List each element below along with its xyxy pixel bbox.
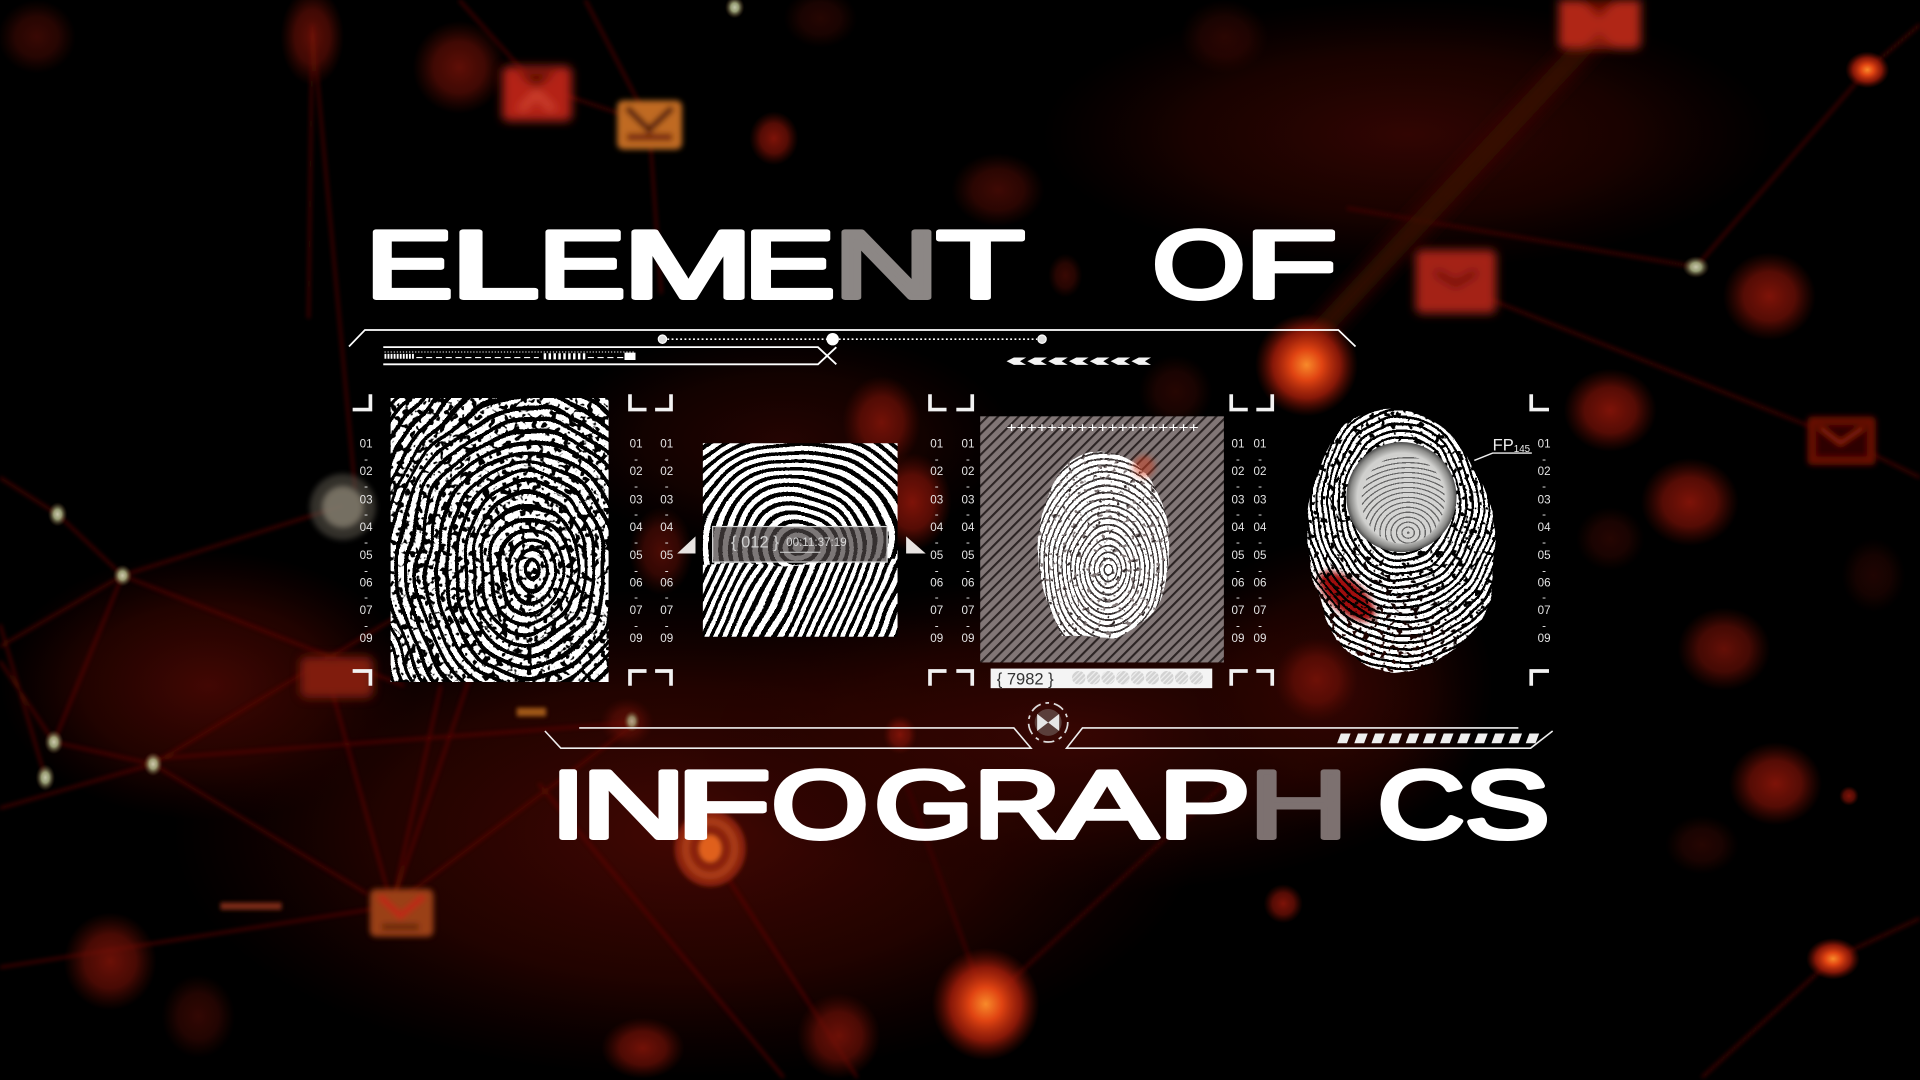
scale 8: - [1542, 508, 1546, 521]
scale 7: - [1258, 564, 1262, 577]
scale 5: 09 [961, 632, 974, 645]
top HUD frame [349, 330, 1356, 364]
scale 7: - [1258, 619, 1262, 632]
scale 4: 01 [930, 438, 943, 451]
title: INFOGRAPH CS [551, 753, 1550, 859]
scale 6: 01 [1231, 438, 1244, 451]
panel: fingerprint 4 with lens [1307, 409, 1532, 673]
scale 3: - [665, 536, 669, 549]
scale 1: - [364, 619, 368, 632]
scale 2: 07 [630, 604, 643, 617]
code tag: { 7982 } [997, 669, 1054, 688]
scale 5: 04 [961, 521, 975, 534]
magnifier lens [1346, 442, 1457, 552]
slash ticks [1337, 733, 1539, 743]
scale 4: 03 [930, 493, 943, 506]
scale 3: - [665, 453, 669, 466]
bottom HUD frame [545, 728, 1553, 748]
scale 2: 05 [630, 549, 643, 562]
scale 5: 01 [961, 438, 974, 451]
scale 3: - [665, 508, 669, 521]
fingerprint image [1038, 452, 1169, 639]
title: ELEMENT OF: T [936, 213, 1025, 319]
icon: envelope orange bottom-left [370, 889, 433, 937]
scale 8: 02 [1538, 465, 1551, 478]
scale 8: - [1542, 480, 1546, 493]
background: blurred small dashes [220, 708, 546, 910]
scale 7: 03 [1254, 493, 1266, 506]
title: ELEMENT OF [365, 213, 1337, 319]
scale 6: 07 [1231, 604, 1244, 617]
scale 5: - [966, 564, 970, 577]
scale 7: - [1258, 591, 1262, 604]
scale 2: - [634, 591, 638, 604]
scale 1: - [364, 508, 368, 521]
scale 5: 02 [961, 465, 974, 478]
scale 7: 01 [1254, 438, 1266, 451]
scale 5: 05 [961, 549, 974, 562]
scale 6: - [1236, 453, 1240, 466]
panel: fingerprint 2 [677, 443, 898, 637]
panel: fingerprint 1 [390, 398, 609, 682]
scale 7: 04 [1254, 521, 1267, 534]
title: INFOGRAPH CS: P [1158, 753, 1251, 859]
scale 8: - [1542, 536, 1546, 549]
plus marks row: +++++++++++++++++++ [1007, 420, 1199, 435]
title: ELEMENT OF: F [1244, 213, 1337, 319]
timecode overlay [713, 527, 887, 562]
FP label [1474, 436, 1532, 460]
emblem: circular scan icon [1026, 700, 1070, 744]
scale 8: - [1542, 591, 1546, 604]
scale 1: 02 [360, 465, 373, 478]
scale 1: 05 [360, 549, 373, 562]
scale 4: - [935, 508, 939, 521]
icon: envelope orange top [617, 100, 682, 149]
scale 7: - [1258, 536, 1262, 549]
icon: envelope red right [1416, 250, 1496, 313]
scale 8: - [1542, 564, 1546, 577]
scale 1: 07 [360, 604, 373, 617]
scale 3: 03 [660, 493, 673, 506]
scale 3: - [665, 619, 669, 632]
scale 6: - [1236, 591, 1240, 604]
panel: fingerprint 3 hatched [980, 416, 1224, 688]
scale 2: 02 [630, 465, 643, 478]
scale 6: - [1236, 536, 1240, 549]
scale 6: 03 [1231, 493, 1244, 506]
background: wide diagonal glow band [1286, 24, 1604, 367]
scale 2: - [634, 564, 638, 577]
scale 3: 05 [660, 549, 673, 562]
icon: envelope dim left [300, 656, 373, 698]
FP label: FP [1493, 436, 1514, 455]
scale 3: 06 [660, 577, 673, 590]
scale 1: - [364, 564, 368, 577]
title: ELEMENT OF: M [623, 213, 754, 319]
scale 8: 04 [1538, 521, 1551, 534]
scale 3: 02 [660, 465, 673, 478]
scale 1: 01 [360, 438, 373, 451]
title: ELEMENT OF: E [538, 213, 626, 319]
scale 4: - [935, 536, 939, 549]
scale 3: - [665, 564, 669, 577]
number scale columns [360, 438, 1551, 645]
scale 8: 06 [1538, 577, 1551, 590]
scale 7: 06 [1254, 577, 1266, 590]
scale 3: 09 [660, 632, 673, 645]
scale 1: - [364, 453, 368, 466]
icon: envelope red top-left [502, 66, 572, 121]
code tag [991, 669, 1212, 688]
scale 5: - [966, 536, 970, 549]
scale 7: - [1258, 480, 1262, 493]
scale 4: 02 [930, 465, 943, 478]
scale 5: - [966, 453, 970, 466]
scale 7: 05 [1254, 549, 1266, 562]
scale 6: 06 [1231, 577, 1244, 590]
title: INFOGRAPH CS: N [581, 753, 686, 859]
scale 7: - [1258, 508, 1262, 521]
scale 1: 03 [360, 493, 373, 506]
scale 5: 03 [961, 493, 974, 506]
timecode overlay: { 012 } [731, 532, 779, 551]
scale 6: - [1236, 508, 1240, 521]
background: small light nodes [36, 0, 1709, 791]
corner brackets [353, 394, 1549, 686]
scale 2: - [634, 453, 638, 466]
title: INFOGRAPH CS: G [874, 753, 974, 859]
scale 1: - [364, 536, 368, 549]
scale 2: 03 [630, 493, 643, 506]
scale 3: - [665, 480, 669, 493]
title: ELEMENT OF: N [833, 213, 940, 319]
icon: envelope red top-right [1559, 0, 1641, 49]
scale 1: - [364, 480, 368, 493]
scale 7: 07 [1254, 604, 1266, 617]
scale 6: 04 [1231, 521, 1245, 534]
scale 2: - [634, 508, 638, 521]
scale 2: - [634, 619, 638, 632]
scale 5: 07 [961, 604, 974, 617]
title: INFOGRAPH CS: I [551, 753, 585, 859]
scale 8: 01 [1538, 438, 1551, 451]
scale 4: - [935, 453, 939, 466]
scale 6: 09 [1231, 632, 1244, 645]
title: INFOGRAPH CS: H [1249, 753, 1348, 859]
dotted timeline with nodes [658, 334, 1046, 345]
scale 3: 01 [660, 438, 673, 451]
red stain [1310, 562, 1383, 631]
scale 7: 02 [1254, 465, 1266, 478]
scale 5: - [966, 591, 970, 604]
red glint [1133, 456, 1155, 478]
scale 8: 05 [1538, 549, 1551, 562]
background: orange ring light [675, 811, 746, 887]
scale 7: 09 [1254, 632, 1266, 645]
scale 8: - [1542, 453, 1546, 466]
chevron row [1007, 358, 1151, 365]
scale 6: - [1236, 619, 1240, 632]
title: INFOGRAPH CS: O [771, 753, 869, 859]
title: INFOGRAPH CS: F [676, 753, 771, 859]
scale 4: - [935, 619, 939, 632]
scale 1: 06 [360, 577, 373, 590]
scale 4: 09 [930, 632, 943, 645]
background: grey ring light [310, 474, 376, 540]
scale 3: 04 [660, 521, 674, 534]
scale 4: 07 [930, 604, 943, 617]
scale 8: 07 [1538, 604, 1551, 617]
scale 5: - [966, 480, 970, 493]
title: ELEMENT OF: E [743, 213, 835, 319]
scale 3: 07 [660, 604, 673, 617]
title: INFOGRAPH CS: S [1465, 753, 1550, 859]
scale 6: - [1236, 480, 1240, 493]
scale 4: 05 [930, 549, 943, 562]
scale 2: - [634, 536, 638, 549]
scale 4: 04 [930, 521, 944, 534]
title: INFOGRAPH CS: A [1057, 753, 1158, 859]
left pointer triangle [677, 536, 696, 553]
FP label: 145 [1514, 444, 1531, 455]
scale 6: 02 [1231, 465, 1244, 478]
scale 6: - [1236, 564, 1240, 577]
title: INFOGRAPH CS: R [974, 753, 1061, 859]
progress bar with X end [383, 347, 836, 364]
scale 2: 06 [630, 577, 643, 590]
scale 4: - [935, 564, 939, 577]
scale 1: 09 [360, 632, 373, 645]
scale 8: 09 [1538, 632, 1551, 645]
scale 5: 06 [961, 577, 974, 590]
scale 7: - [1258, 453, 1262, 466]
scale 6: 05 [1231, 549, 1244, 562]
scale 2: 09 [630, 632, 643, 645]
scale 1: 04 [360, 521, 373, 534]
timecode overlay: 00:11:37:19 [786, 536, 847, 549]
scale 5: - [966, 619, 970, 632]
scale 4: - [935, 591, 939, 604]
scale 2: - [634, 480, 638, 493]
title: ELEMENT OF: L [450, 213, 540, 319]
title: INFOGRAPH CS: C [1378, 753, 1465, 859]
scale 3: - [665, 591, 669, 604]
title: ELEMENT OF: E [365, 213, 453, 319]
scale 8: - [1542, 619, 1546, 632]
background: network lines [0, 478, 857, 1078]
scale 4: - [935, 480, 939, 493]
scale 2: 01 [630, 438, 643, 451]
scale 4: 06 [930, 577, 943, 590]
scale 8: 03 [1538, 493, 1551, 506]
icon: envelope dark far right [1807, 416, 1876, 465]
title: ELEMENT OF: O [1152, 213, 1245, 319]
scale 5: - [966, 508, 970, 521]
scale 2: 04 [630, 521, 643, 534]
right pointer triangle [906, 536, 926, 553]
scale 1: - [364, 591, 368, 604]
